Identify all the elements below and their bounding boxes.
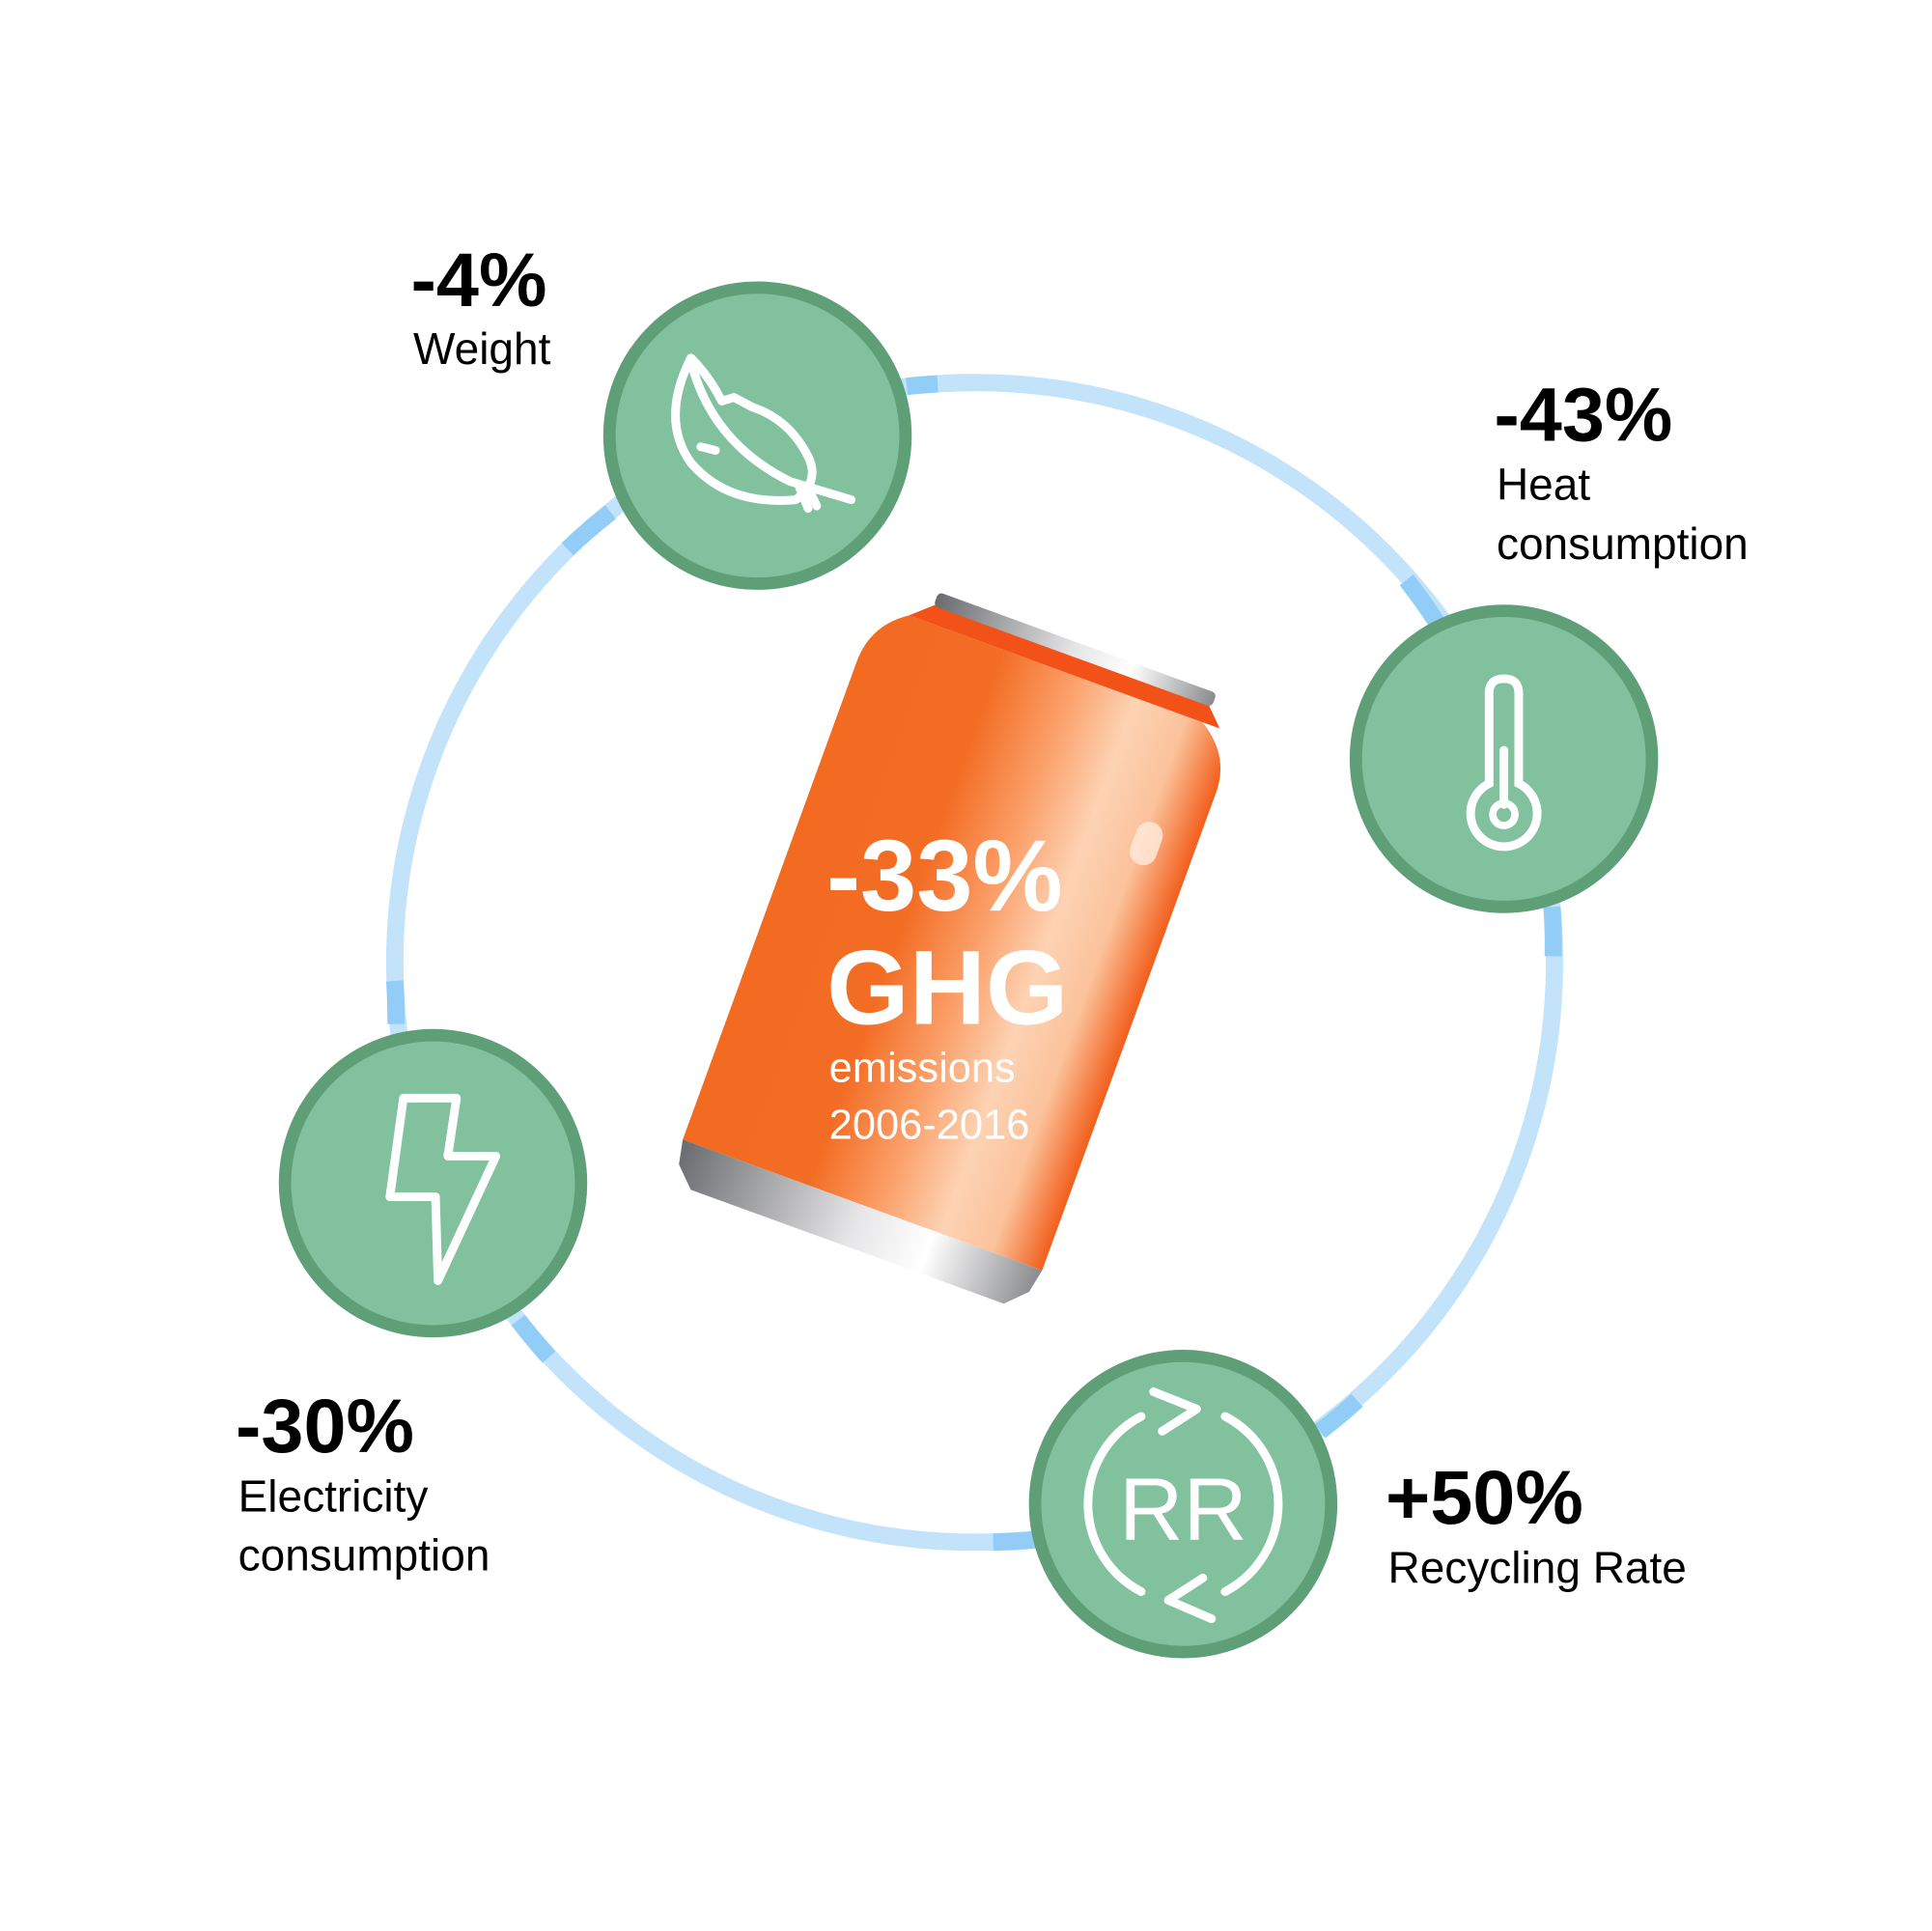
label: heat: Heat bbox=[1497, 460, 1590, 510]
can text: emissions bbox=[829, 1046, 1016, 1092]
can top rim bbox=[909, 595, 1227, 728]
icon: lightning bbox=[285, 1035, 581, 1331]
ring bbox=[395, 382, 1554, 1542]
label: electricity: consumption bbox=[238, 1530, 490, 1581]
can text: -33% bbox=[826, 820, 1063, 933]
label: recycling: Recycling Rate bbox=[1388, 1543, 1687, 1593]
can text bbox=[826, 820, 1068, 1149]
label: heat bbox=[1494, 371, 1749, 569]
can body bbox=[683, 604, 1237, 1271]
can text: GHG bbox=[826, 930, 1068, 1048]
highlight bbox=[1126, 818, 1166, 869]
label: electricity bbox=[236, 1383, 490, 1581]
can text: 2006-2016 bbox=[829, 1103, 1029, 1149]
label: heat: consumption bbox=[1497, 518, 1749, 569]
label: electricity: Electricity bbox=[238, 1470, 428, 1521]
label: recycling bbox=[1386, 1454, 1687, 1593]
can bottom bbox=[667, 1139, 1042, 1312]
label: recycling: +50% bbox=[1386, 1454, 1583, 1540]
icon: recycle bbox=[1035, 1356, 1331, 1652]
label: heat: -43% bbox=[1494, 371, 1672, 457]
icon: recycle: RR bbox=[1119, 1461, 1247, 1559]
icon: feather bbox=[609, 288, 906, 584]
label: weight bbox=[411, 237, 551, 374]
label: electricity: -30% bbox=[236, 1383, 414, 1469]
can bbox=[667, 574, 1248, 1312]
icon: thermometer bbox=[1356, 611, 1652, 907]
label: weight: Weight bbox=[413, 323, 551, 374]
label: weight: -4% bbox=[410, 237, 546, 322]
